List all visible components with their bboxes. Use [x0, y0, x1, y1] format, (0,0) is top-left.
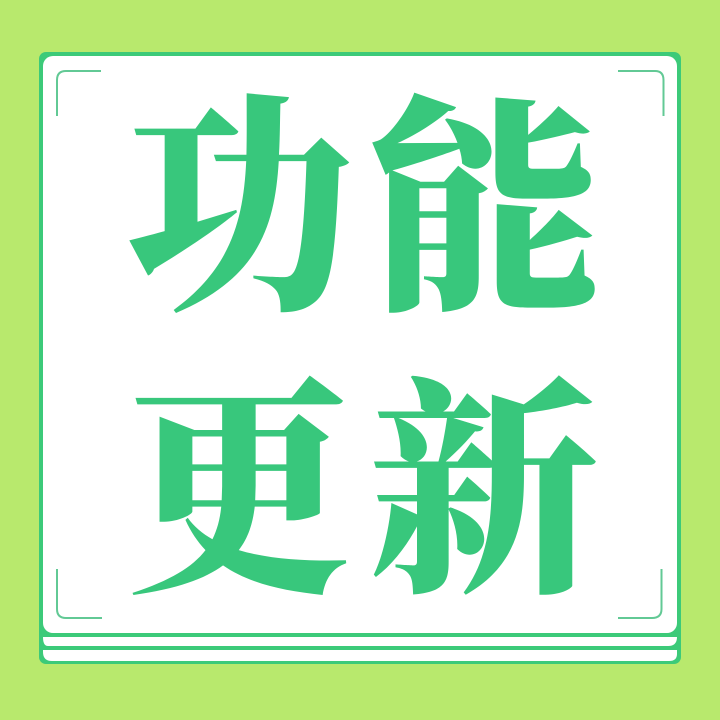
title: 功能更新: 更 [124, 367, 354, 623]
title: 功能更新: 能 [369, 85, 600, 341]
corner brackets [57, 71, 664, 618]
panel: stacked page card [39, 52, 681, 664]
title: 功能更新: 新 [368, 367, 600, 623]
title: 功能更新: 功 [124, 85, 355, 341]
title: 功能更新 [124, 85, 600, 623]
